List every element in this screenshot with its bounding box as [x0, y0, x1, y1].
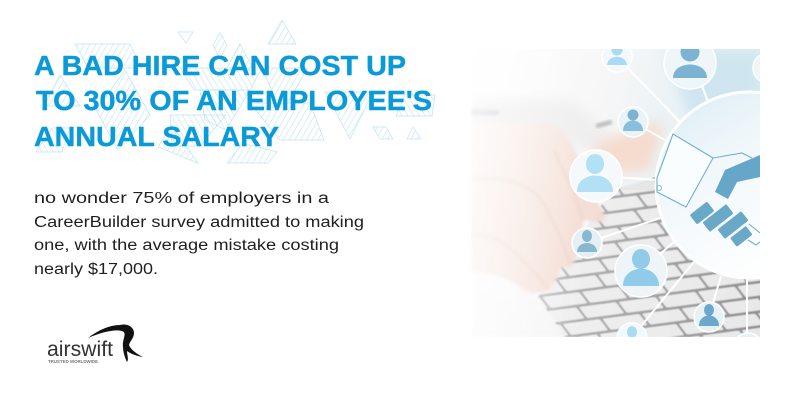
- left photo fade: [471, 108, 562, 324]
- logo bird icon: [88, 324, 143, 362]
- keyboard: [538, 170, 770, 337]
- blurred screen and laptop: [526, 49, 760, 177]
- body text: nearly $17,000.: [34, 261, 158, 278]
- hands: [471, 122, 606, 293]
- person node: bottom: [616, 322, 648, 337]
- person node: top right: [752, 54, 760, 82]
- photo: hands on keyboard with network overlay: [471, 49, 760, 337]
- person node: upper middle: [618, 107, 648, 137]
- decorative triangle pattern: [36, 20, 435, 163]
- logo tagline: TRUSTED WORLDWIDE: [48, 359, 98, 364]
- title: [34, 50, 432, 152]
- title: ANNUAL SALARY: [34, 121, 279, 152]
- title: A BAD HIRE CAN COST UP: [34, 50, 406, 81]
- large handshake circle: [654, 90, 760, 280]
- body text: no wonder 75% of employers in a: [34, 190, 329, 207]
- person node: top: [607, 49, 632, 72]
- title: TO 30% OF AN EMPLOYEE'S: [36, 85, 432, 116]
- body text: [34, 190, 364, 278]
- body text: one, with the average mistake costing: [34, 237, 339, 254]
- logo wordmark: airswift: [47, 338, 113, 361]
- logo: airswift: [47, 324, 143, 364]
- person node: lower left: [572, 228, 602, 258]
- photo background: [586, 49, 760, 337]
- body text: CareerBuilder survey admitted to making: [34, 214, 364, 231]
- person node: center large: [615, 245, 667, 297]
- person node: top large: [663, 49, 717, 90]
- person node: left large: [570, 150, 622, 202]
- handshake icon: [657, 134, 760, 247]
- person node: bottom right: [694, 302, 724, 332]
- person node: bottom corner: [737, 332, 759, 337]
- network connector lines: [602, 68, 748, 332]
